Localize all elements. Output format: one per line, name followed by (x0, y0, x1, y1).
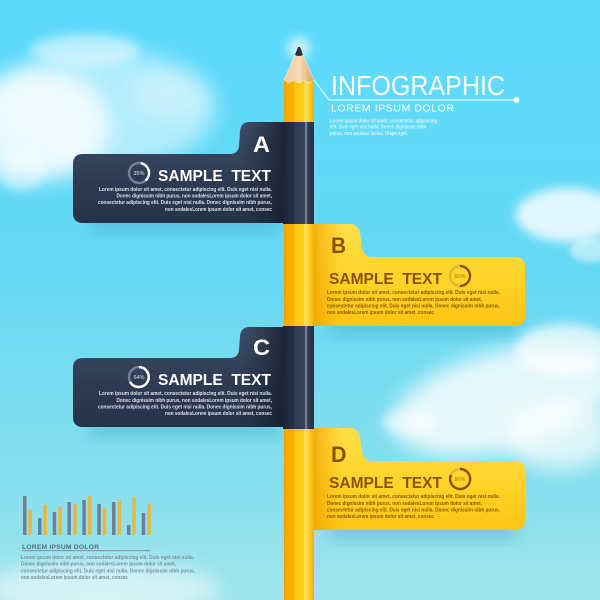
body text B: Donec dignissim nibh purus, non sodalesLorem ipsum dolor sit amet, (327, 297, 483, 303)
body text D (327, 494, 501, 520)
cloud: right upper (516, 188, 600, 262)
header body text: elit. Duis eget nisi nulla. Donec dignissim nibh (330, 124, 426, 130)
body text C: non sodalesLorem ipsum dolor sit amet, consec (165, 411, 272, 417)
letter C: C (253, 335, 270, 360)
header body text: purus, non sodales lectus. Uisjet eget. (330, 131, 409, 137)
connector line with dot (314, 80, 520, 103)
body text C: Donec dignissim nibh purus, non sodalesLorem ipsum dolor sit amet, (116, 398, 273, 404)
progress ring 64%: 64% (133, 375, 145, 381)
cloud: bottom left (0, 562, 220, 600)
header body text: Lorem ipsum dolor sit amet, consectetur adipiscing (330, 118, 437, 124)
body text A: Lorem ipsum dolor sit amet, consectetur adipiscing elit. Duis eget nisi nulla. (99, 187, 273, 193)
title: INFOGRAPHIC: INFOGRAPHIC (331, 70, 505, 101)
bar chart (23, 496, 151, 535)
body text B: Lorem ipsum dolor sit amet, consectetur adipiscing elit. Duis eget nisi nulla. (327, 290, 501, 296)
chart body text: Donec dignissim nibh purus, non sodalesLorem ipsum dolor sit amet, (21, 562, 177, 568)
progress ring 64% (129, 367, 149, 387)
progress ring 35% (129, 163, 151, 183)
panel shadows (90, 215, 515, 540)
body text C: consectetur adipiscing elit. Duis eget nisi nulla. Donec dignissim nibh purus, (98, 404, 273, 410)
title B: SAMPLE TEXT (329, 271, 442, 288)
cloud: top left (0, 34, 215, 190)
body text D: Donec dignissim nibh purus, non sodalesLorem ipsum dolor sit amet, (327, 501, 483, 507)
header block (314, 70, 520, 137)
pencil wood tip (284, 55, 314, 83)
body text C (98, 391, 273, 417)
chart body text (21, 555, 196, 581)
letter D: D (331, 442, 346, 467)
header body text (330, 118, 437, 137)
chart rule (22, 550, 150, 551)
pencil body (284, 80, 314, 600)
chart body text: non sodalesLorem ipsum dolor sit amet, consec (21, 575, 128, 581)
panel A (73, 122, 314, 224)
body text A: Donec dignissim nibh purus, non sodalesLorem ipsum dolor sit amet, (116, 194, 273, 200)
body text A (98, 187, 273, 213)
progress ring 50%: 50% (454, 274, 466, 280)
title A: SAMPLE TEXT (158, 168, 271, 185)
progress ring 86% (450, 469, 470, 489)
panel C (73, 326, 314, 429)
body text B: consectetur adipiscing elit. Duis eget nisi nulla. Donec dignissim nibh purus, (327, 304, 501, 310)
letter B: B (331, 233, 346, 258)
body text D: non sodalesLorem ipsum dolor sit amet, consec (327, 514, 434, 520)
body text D: Lorem ipsum dolor sit amet, consectetur adipiscing elit. Duis eget nisi nulla. (327, 494, 501, 500)
body text C: Lorem ipsum dolor sit amet, consectetur adipiscing elit. Duis eget nisi nulla. (99, 391, 273, 397)
pencil (284, 37, 314, 600)
body text A: consectetur adipiscing elit. Duis eget nisi nulla. Donec dignissim nibh purus, (98, 200, 273, 206)
chart heading: LOREM IPSUM DOLOR (22, 544, 99, 551)
title C: SAMPLE TEXT (158, 372, 271, 389)
band A (283, 122, 314, 224)
title D: SAMPLE TEXT (329, 475, 442, 492)
progress ring 35%: 35% (133, 171, 145, 177)
letter A: A (253, 132, 270, 157)
body text B: non sodalesLorem ipsum dolor sit amet, consec (327, 310, 434, 316)
panel B (314, 224, 525, 326)
subtitle: LOREM IPSUM DOLOR (331, 102, 454, 114)
chart body text: Lorem ipsum dolor sit amet, consectetur adipiscing elit. Duis eget nisi nulla. (21, 555, 195, 561)
panel D (314, 428, 525, 530)
body text A: non sodalesLorem ipsum dolor sit amet, consec (165, 207, 272, 213)
pencil lead (295, 47, 303, 56)
progress ring 50% (450, 266, 470, 286)
chart caption block (21, 544, 196, 581)
tip glow (288, 37, 310, 59)
cloud: right lower (381, 324, 600, 476)
chart body text: consectetur adipiscing elit. Duis eget nisi nulla. Donec dignissim nibh purus, (21, 568, 196, 574)
band C (283, 326, 314, 429)
body text B (327, 290, 501, 316)
progress ring 86%: 86% (454, 477, 466, 483)
body text D: consectetur adipiscing elit. Duis eget nisi nulla. Donec dignissim nibh purus, (327, 508, 501, 514)
